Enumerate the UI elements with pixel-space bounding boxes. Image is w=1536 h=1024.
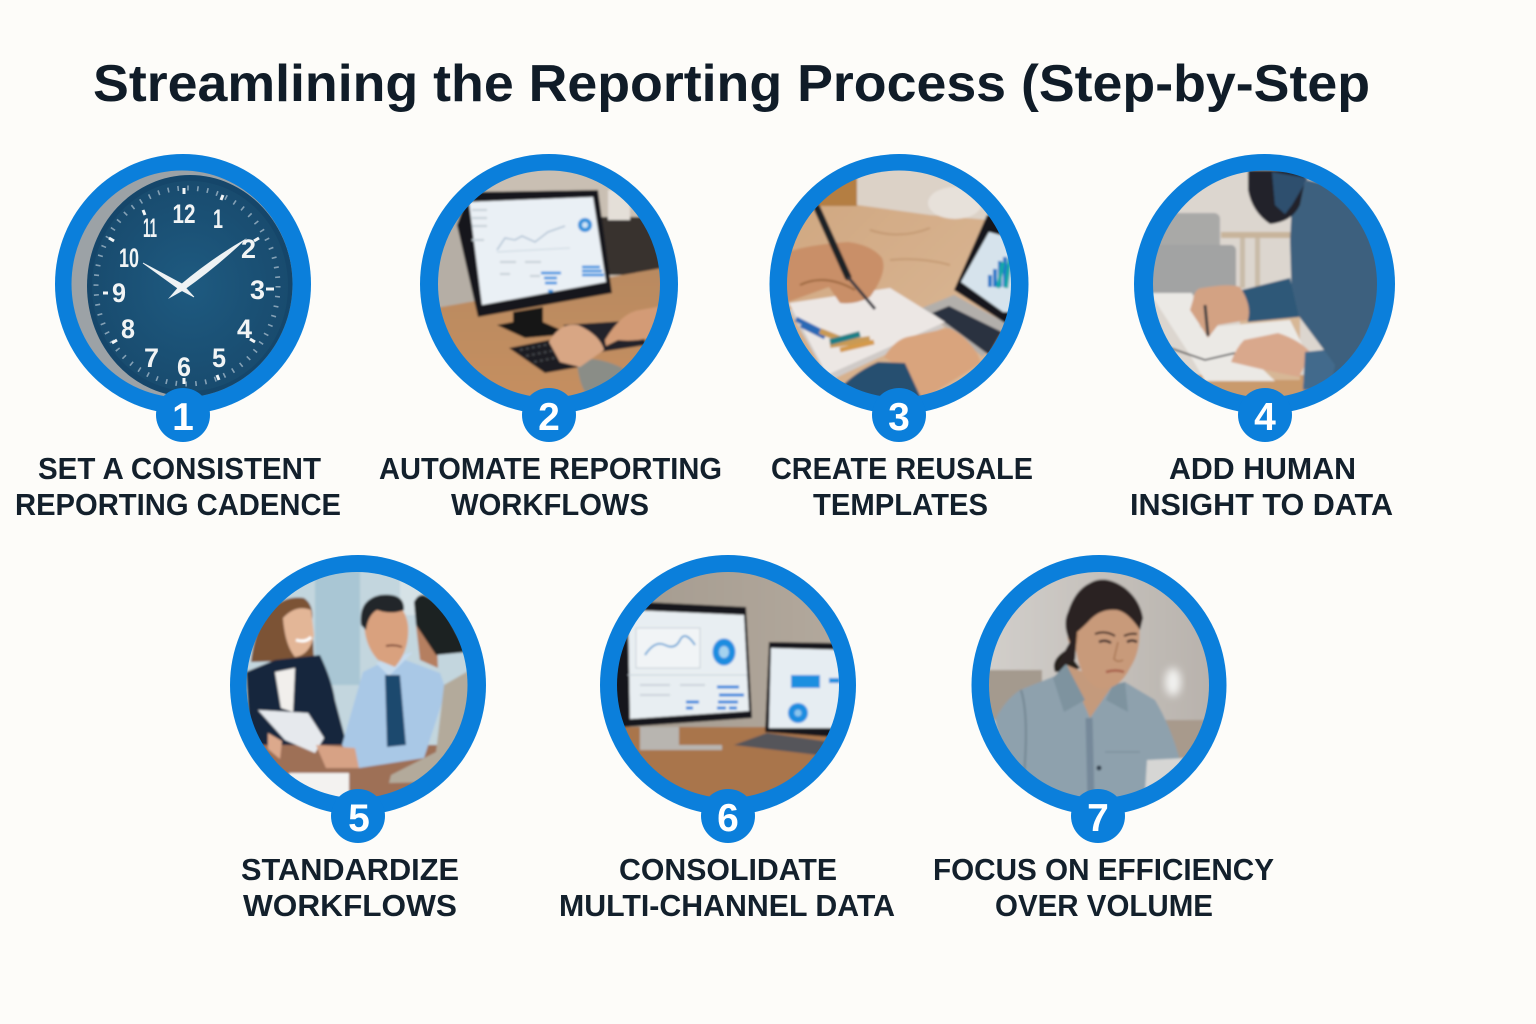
- photo: three colleagues in a meeting: [246, 572, 468, 796]
- photo: wall clock: 7: [144, 343, 159, 373]
- photo: monitor and laptop dashboards: [617, 572, 839, 796]
- number badge 6: [701, 789, 755, 843]
- label: step 3: CREATE REUSALE: [771, 451, 1033, 486]
- title: Streamlining the Reporting Process (Step-by-Step: [93, 55, 1370, 113]
- label: step 3: [771, 451, 1033, 522]
- panel: step 1 set a consistent reporting cadence: [55, 154, 311, 442]
- photo: wall clock: 1: [213, 204, 223, 234]
- photo: wall clock: 6: [177, 352, 191, 382]
- label: step 7: [933, 852, 1274, 923]
- photo: person annotating a report: [1153, 170, 1377, 396]
- ring: [230, 555, 486, 815]
- label: step 4: [1130, 451, 1393, 522]
- number badge 6: 6: [717, 797, 739, 840]
- label: step 5: WORKFLOWS: [243, 888, 457, 923]
- photo: wall clock: 5: [212, 343, 226, 373]
- number badge 1: 1: [172, 396, 194, 439]
- ring: [770, 154, 1028, 414]
- label: step 3: TEMPLATES: [813, 487, 988, 522]
- panel: step 6 consolidate multi-channel data: [600, 555, 856, 843]
- label: step 2: [379, 451, 722, 522]
- panel: step 4 add human insight to data: [1134, 154, 1395, 442]
- number badge 2: [522, 388, 576, 442]
- photo: woman concentrating at laptop: [989, 572, 1209, 796]
- photo: wall clock: 10: [119, 243, 139, 273]
- label: step 5: [241, 852, 459, 923]
- panel: step 2 automate reporting workflows: [420, 154, 678, 442]
- photo: wall clock: [72, 170, 292, 396]
- number badge 3: 3: [888, 396, 910, 439]
- number badge 5: [331, 789, 385, 843]
- label: step 6: [559, 852, 895, 923]
- photo: wall clock: 4: [237, 314, 252, 344]
- panel: step 7 focus on efficiency over volume: [972, 555, 1226, 843]
- label: step 4: ADD HUMAN: [1169, 451, 1356, 486]
- ring: [600, 555, 856, 815]
- photo: monitor and keyboard on desk: [438, 170, 660, 396]
- label: step 4: INSIGHT TO DATA: [1130, 487, 1393, 522]
- label: step 6: CONSOLIDATE: [619, 852, 837, 887]
- photo: wall clock: 8: [121, 314, 135, 344]
- label: step 1: REPORTING CADENCE: [15, 487, 341, 522]
- photo: hands writing beside a laptop: [787, 170, 1011, 396]
- number badge 7: 7: [1087, 797, 1109, 840]
- label: step 1: SET A CONSISTENT: [38, 451, 321, 486]
- number badge 1: [156, 388, 210, 442]
- ring: [55, 154, 311, 414]
- label: step 7: OVER VOLUME: [995, 888, 1213, 923]
- ring: [972, 555, 1226, 815]
- label: step 1: [15, 451, 341, 522]
- number badge 4: [1238, 388, 1292, 442]
- number badge 5: 5: [348, 797, 370, 840]
- number badge 4: 4: [1254, 396, 1276, 439]
- label: step 6: MULTI-CHANNEL DATA: [559, 888, 895, 923]
- panel: step 3 create reusable templates: [770, 154, 1028, 442]
- photo: wall clock: 3: [250, 275, 265, 305]
- photo: wall clock: 9: [112, 278, 126, 308]
- ring: [1134, 154, 1395, 414]
- number badge 7: [1071, 789, 1125, 843]
- label: step 5: STANDARDIZE: [241, 852, 459, 887]
- ring: [420, 154, 678, 414]
- label: step 2: WORKFLOWS: [451, 487, 649, 522]
- photo: wall clock: 12: [172, 199, 196, 229]
- label: step 7: FOCUS ON EFFICIENCY: [933, 852, 1274, 887]
- number badge 3: [872, 388, 926, 442]
- panel: step 5 standardize workflows: [230, 555, 486, 843]
- number badge 2: 2: [538, 396, 560, 439]
- photo: wall clock: 2: [241, 234, 256, 264]
- photo: wall clock: 11: [143, 213, 157, 243]
- label: step 2: AUTOMATE REPORTING: [379, 451, 722, 486]
